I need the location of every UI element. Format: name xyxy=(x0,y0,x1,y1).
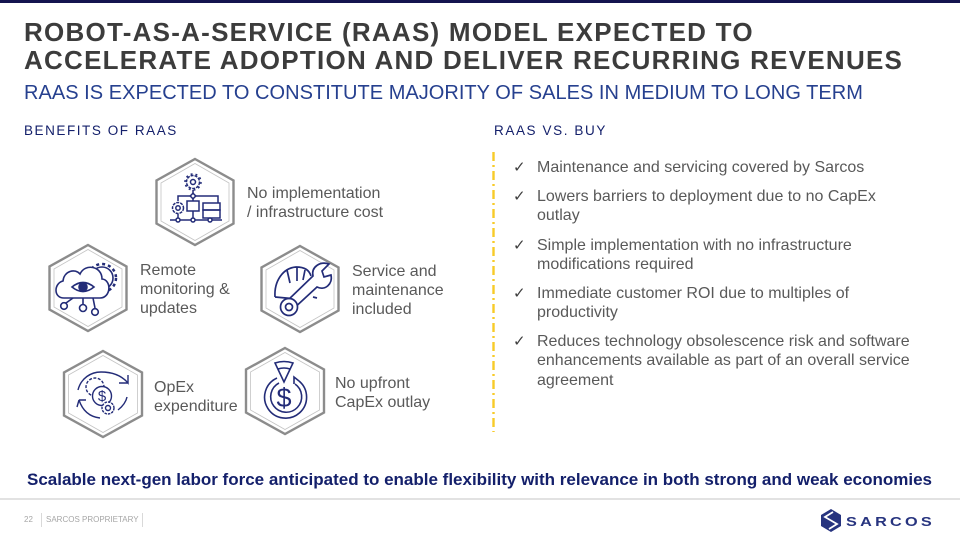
label: service: maintenance xyxy=(352,282,444,299)
label: no upfront xyxy=(335,375,430,411)
icon: service hexagon xyxy=(260,244,340,334)
heading: RaaS vs. buy: RAAS VS. BUY xyxy=(494,123,607,138)
list item 3: ✓ xyxy=(513,236,526,254)
label: monitoring xyxy=(140,262,230,317)
icon: OpEx hexagon: $ xyxy=(98,388,107,405)
title xyxy=(24,16,903,75)
footer label: SARCOS PROPRIETARY xyxy=(46,515,139,524)
list item 5: enhancements available as part of an overall service xyxy=(537,352,910,369)
list item 4: ✓ xyxy=(513,284,526,302)
callout: Scalable next-gen labor force anticipated to enable flexibility with relevance in both strong and weak economies xyxy=(27,470,932,489)
heading: benefits of RaaS: BENEFITS OF RAAS xyxy=(24,123,178,138)
list item 4: Immediate customer ROI due to multiples of xyxy=(537,285,849,302)
list item 3: modifications required xyxy=(537,256,694,273)
list item 1: Maintenance and servicing covered by Sarcos xyxy=(537,159,864,176)
list item 2: ✓ xyxy=(513,187,526,205)
label: OpEx: expenditure xyxy=(154,398,238,415)
list item 5 xyxy=(513,332,910,389)
list item 5: agreement xyxy=(537,372,614,389)
logo xyxy=(821,509,935,532)
list item 3: Simple implementation with no infrastructure xyxy=(537,237,852,254)
title: ROBOT-AS-A-SERVICE (RAAS) MODEL EXPECTED TO xyxy=(24,16,754,46)
label: monitoring: updates xyxy=(140,300,197,317)
icon: no upfront hexagon: $ xyxy=(276,383,292,413)
label: monitoring: Remote xyxy=(140,262,196,279)
list item 4: productivity xyxy=(537,304,618,321)
footer rule xyxy=(0,498,960,500)
benefit list xyxy=(513,158,910,389)
divider: dashed yellow xyxy=(492,152,495,432)
label: implementation xyxy=(247,185,383,221)
label: OpEx xyxy=(154,379,238,415)
icon: no upfront hexagon xyxy=(244,346,326,436)
top bar xyxy=(0,0,960,3)
list item 5: Reduces technology obsolescence risk and software xyxy=(537,333,910,350)
label: no upfront: No upfront xyxy=(335,375,410,392)
list item 4 xyxy=(513,284,850,321)
list item 2 xyxy=(513,187,876,224)
label: monitoring: monitoring & xyxy=(140,281,230,298)
label: no upfront: CapEx outlay xyxy=(335,394,430,411)
label: service: included xyxy=(352,301,412,318)
list item 3 xyxy=(513,236,852,273)
icon: monitoring hexagon xyxy=(48,244,128,332)
list item 1: ✓ xyxy=(513,158,526,176)
page number: 22 xyxy=(24,515,33,524)
logo: SARCOS xyxy=(846,515,935,529)
label: service xyxy=(352,263,444,318)
icon: OpEx hexagon xyxy=(62,350,144,438)
label: service: Service and xyxy=(352,263,436,280)
subtitle: RAAS IS EXPECTED TO CONSTITUTE MAJORITY OF SALES IN MEDIUM TO LONG TERM xyxy=(24,82,863,104)
icon: implementation hexagon xyxy=(155,158,235,246)
list item 2: Lowers barriers to deployment due to no CapEx xyxy=(537,188,876,205)
list item 2: outlay xyxy=(537,207,580,224)
label: implementation: No implementation xyxy=(247,185,380,202)
footer label xyxy=(41,513,143,527)
list item 5: ✓ xyxy=(513,332,526,350)
label: implementation: / infrastructure cost xyxy=(247,204,383,221)
title: ACCELERATE ADOPTION AND DELIVER RECURRING REVENUES xyxy=(24,45,903,75)
label: OpEx: OpEx xyxy=(154,379,194,396)
